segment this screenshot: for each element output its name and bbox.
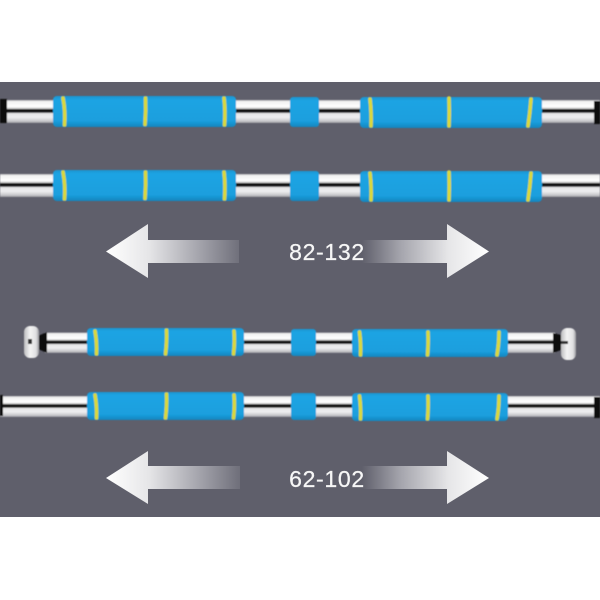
bar 4: retracted bar <box>0 392 600 421</box>
bar 3: retracted bar with end caps <box>24 326 576 360</box>
right arrow, upper range <box>362 224 489 278</box>
background panel <box>0 82 600 517</box>
left arrow, lower range <box>106 451 240 504</box>
bar 2: extended pull-up bar <box>0 170 600 202</box>
label: 82-132: 82-132 <box>289 239 365 265</box>
right arrow, lower range <box>362 451 489 504</box>
label: 62-102: 62-102 <box>289 466 365 492</box>
bar 1: extended pull-up bar <box>0 96 600 128</box>
left arrow, upper range <box>106 224 239 278</box>
